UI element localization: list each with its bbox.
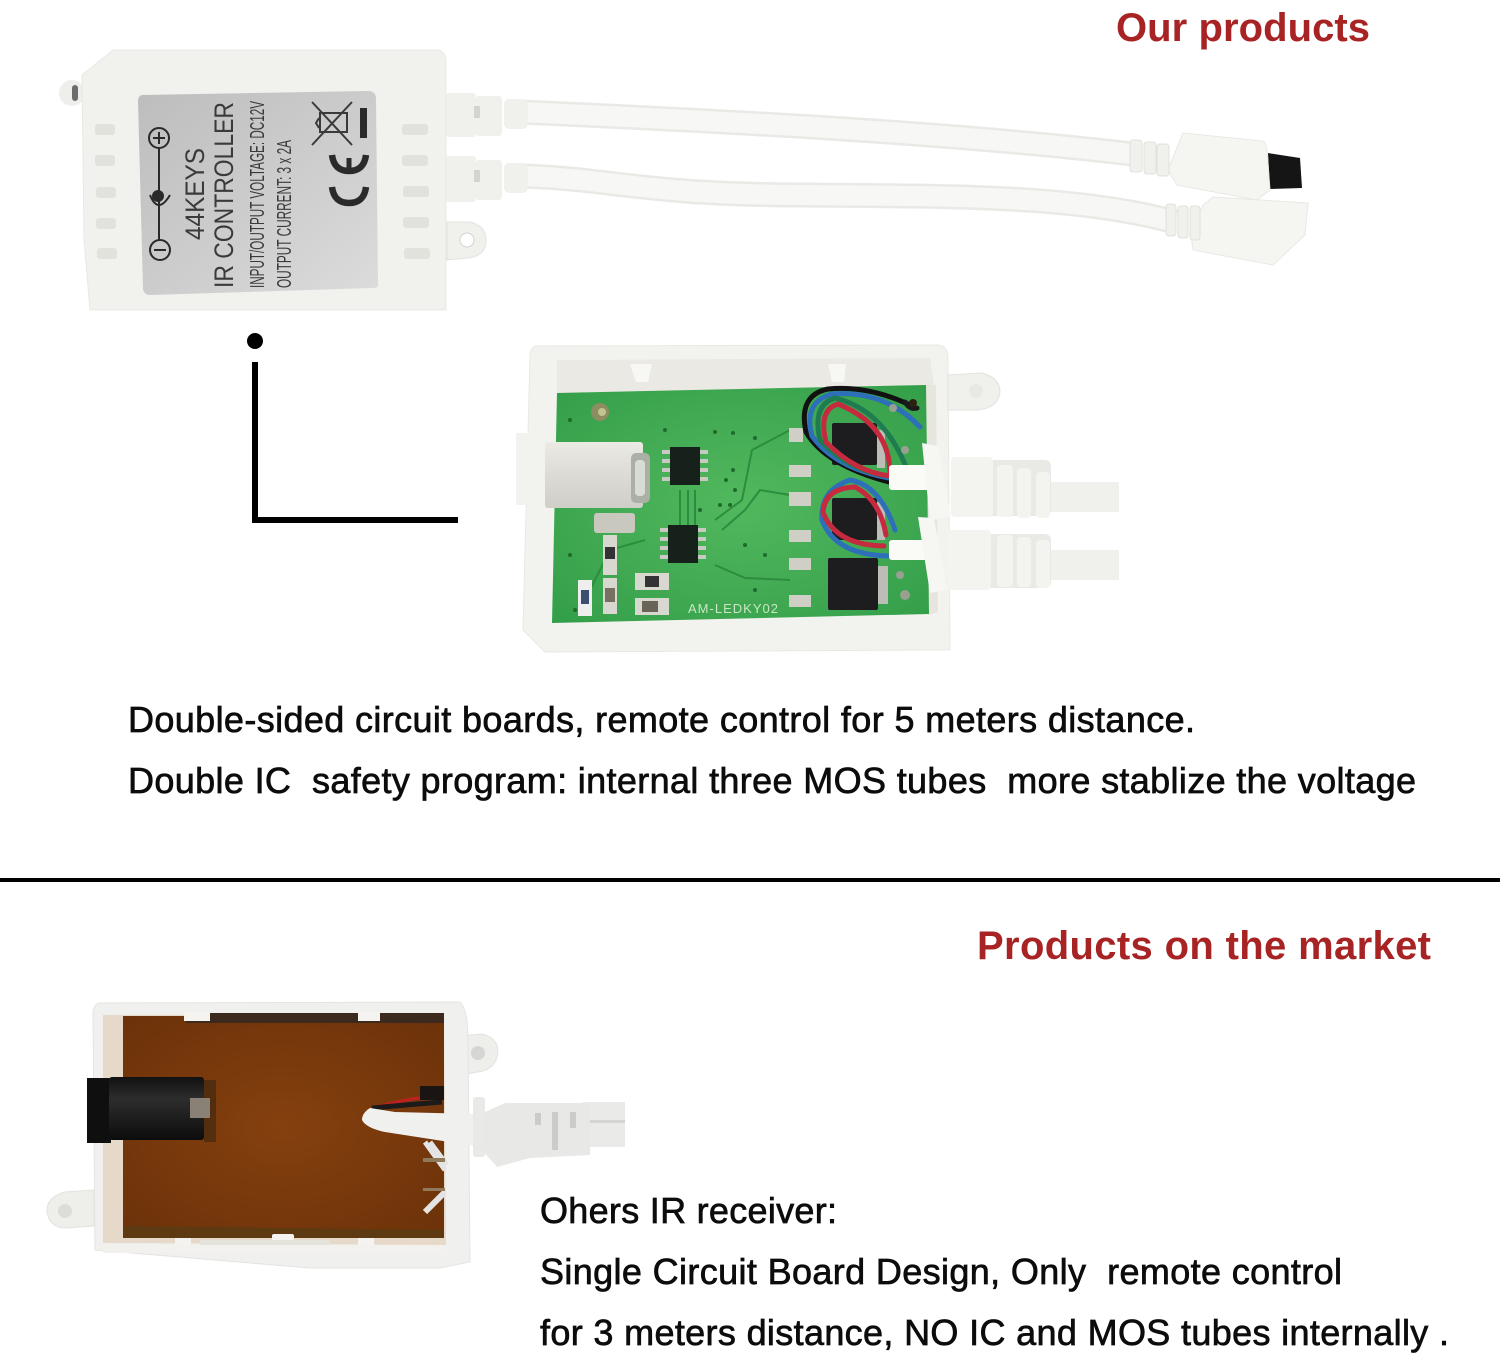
power jack, black: [87, 1077, 216, 1143]
lug: left tab: [47, 1190, 94, 1228]
traces: [590, 430, 790, 590]
cable: lower with socket and strain relief: [889, 517, 1119, 593]
housing: [523, 345, 950, 652]
connector: upper male plug: [1268, 153, 1302, 189]
polarity symbol: [149, 128, 170, 260]
power jack, white: [516, 433, 650, 533]
divider between sections: [0, 878, 1500, 882]
receiver lead: [362, 1108, 475, 1146]
photo: IR controller with cables: [59, 50, 1308, 310]
text block: competitor drawbacks: Single Circuit Board Design, Only remote control: [540, 1251, 1342, 1292]
printed label text: IR CONTROLLER: [209, 102, 239, 288]
text block: competitor drawbacks: Ohers IR receiver:: [540, 1190, 837, 1231]
clips: [175, 1012, 380, 1248]
wires: [804, 388, 920, 556]
text block: competitor drawbacks: for 3 meters distance, NO IC and MOS tubes internally .: [540, 1312, 1449, 1353]
brown single-sided board: [123, 1016, 444, 1238]
text block: our product benefits: Double-sided circuit boards, remote control for 5 meters distance.: [128, 699, 1195, 740]
photo: competitor open controller: [47, 1002, 625, 1268]
cable: upper: [520, 112, 1140, 155]
cable: upper with socket and strain relief: [889, 443, 1119, 520]
chip: lower IC: [660, 525, 706, 563]
printed label text: 44KEYS: [180, 148, 210, 240]
vias: [568, 403, 767, 612]
solder pads: [789, 428, 811, 607]
chip: upper IC: [662, 447, 708, 485]
lug: right mounting tab: [447, 222, 486, 260]
lug: left mounting tab: [59, 80, 85, 106]
heading: Our products: Our products: [1116, 6, 1370, 50]
lug: tab: [948, 373, 1000, 410]
heading: Products on the market: Products on the market: [977, 924, 1431, 968]
connector: lower female plug: [1191, 197, 1308, 265]
controller body: [82, 50, 446, 310]
small wires at the board edge: [372, 1086, 447, 1212]
MOS tubes: [828, 423, 878, 610]
photo: open controller with double-sided circuit board: [516, 345, 1119, 652]
icon: crossed-out bin: [312, 102, 352, 145]
printed label text: OUTPUT CURRENT: 3 x 2A: [274, 140, 296, 288]
strain reliefs at the controller: [446, 93, 528, 202]
circuit board: [552, 385, 929, 623]
lower wall: [103, 1245, 447, 1253]
small components: [578, 535, 669, 616]
callout dot and elbow line: [247, 333, 458, 520]
cable: lower: [525, 176, 1175, 222]
label panel: [138, 91, 378, 295]
clips: [630, 364, 652, 382]
solder blobs: [889, 404, 910, 600]
vent slots: [95, 124, 430, 259]
housing: [93, 1002, 470, 1268]
icon: CE mark: [332, 155, 366, 203]
text block: our product benefits: [128, 699, 1416, 801]
plug and cable: [473, 1097, 625, 1167]
printed label text: [180, 101, 296, 288]
text block: our product benefits: Double IC safety program: internal three MOS tubes more stablize the voltage: [128, 760, 1416, 801]
board marking: AM-LEDKY02: [688, 601, 778, 616]
text block: competitor drawbacks: [540, 1190, 1449, 1353]
lug: right tab: [460, 1034, 498, 1075]
